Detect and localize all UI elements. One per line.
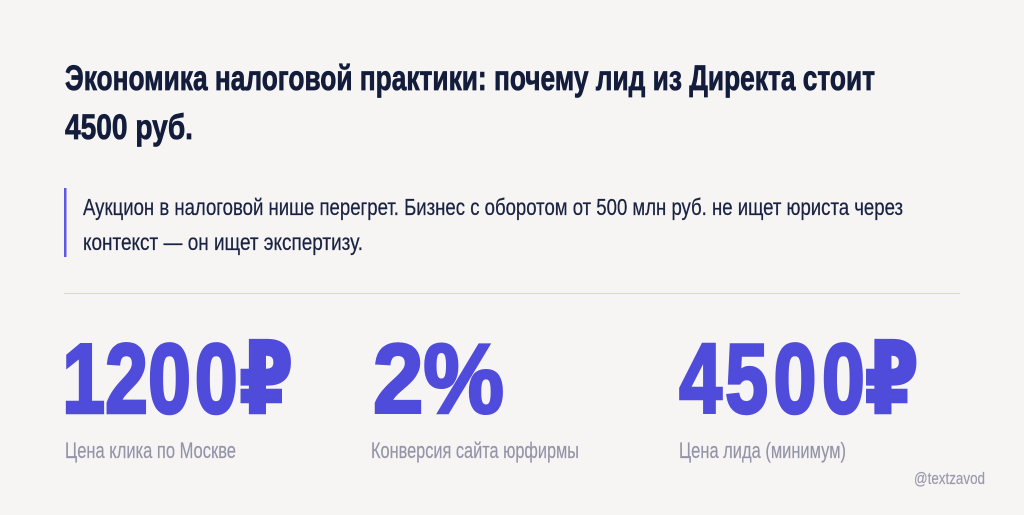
stat: lead price: 4500₽ xyxy=(679,323,918,434)
callout: lead paragraph with accent bar: контекст — он ищет экспертизу. xyxy=(83,229,363,255)
title: 4500 руб. xyxy=(65,108,193,147)
stat: click price: Цена клика по Москве xyxy=(65,438,236,463)
stat: conversion xyxy=(371,324,579,463)
callout: lead paragraph with accent bar xyxy=(64,188,903,257)
stat: lead price: Цена лида (минимум) xyxy=(679,438,846,463)
stat: click price: 1200₽ xyxy=(62,323,293,434)
watermark handle: @textzavod xyxy=(914,469,985,488)
stat: conversion: Конверсия сайта юрфирмы xyxy=(371,438,579,463)
title xyxy=(65,59,875,147)
stat: conversion: 2% xyxy=(373,324,504,434)
